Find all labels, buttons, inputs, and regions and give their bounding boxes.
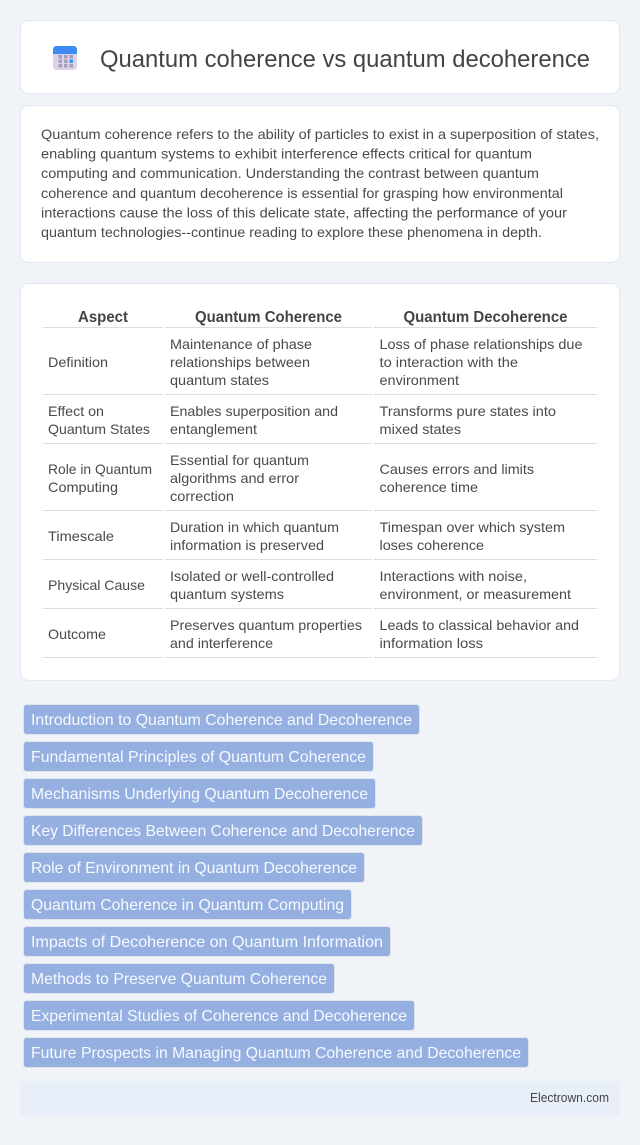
link: experimental studies: [24, 1000, 414, 1030]
link: impacts: [24, 926, 390, 956]
table row: role in quantum computing: correction: [170, 488, 234, 504]
link: future prospects: Future Prospects in Managing Quantum Coherence and Decoherence: [31, 1045, 521, 1062]
table row: physical cause: Physical Cause: [48, 577, 145, 593]
table row: outcome: and interference: [170, 635, 273, 651]
table row: outcome: Leads to classical behavior and: [380, 617, 579, 633]
table row: physical cause: Isolated or well-controlled: [170, 568, 334, 584]
panel: introduction: [20, 106, 620, 262]
link: role of environment: [24, 852, 364, 882]
link: introduction: Introduction to Quantum Coherence and Decoherence: [31, 712, 412, 729]
text block: introduction paragraph: [41, 126, 599, 240]
link: fundamental principles: [24, 742, 374, 772]
table row: definition: [48, 336, 583, 388]
link: fundamental principles: Fundamental Principles of Quantum Coherence: [31, 749, 366, 766]
table header row: [78, 309, 568, 326]
table row: role in quantum computing: Role in Quantum: [48, 461, 152, 477]
table header row: Aspect: [78, 309, 129, 326]
table row: effect on quantum states: entanglement: [170, 421, 257, 437]
text block: introduction paragraph: enabling quantum systems to exhibit interference effects critical for quantum: [41, 146, 532, 162]
title: Quantum coherence vs quantum decoherence: [100, 46, 590, 73]
table row: effect on quantum states: Quantum States: [48, 421, 150, 437]
link: quantum computing: Quantum Coherence in Quantum Computing: [31, 897, 344, 914]
table row: definition: Loss of phase relationships due: [380, 336, 583, 352]
link: mechanisms: Mechanisms Underlying Quantum Decoherence: [31, 786, 368, 803]
table row: timescale: information is preserved: [170, 537, 324, 553]
table header row: Quantum Decoherence: [404, 309, 568, 326]
icon: calendar: [53, 46, 77, 70]
link: impacts: Impacts of Decoherence on Quantum Information: [31, 934, 383, 951]
list of section links: [24, 704, 528, 1068]
table row: outcome: [48, 617, 579, 651]
table row: effect on quantum states: mixed states: [380, 421, 461, 437]
table row: role in quantum computing: Causes errors and limits: [380, 461, 534, 477]
table row: effect on quantum states: [48, 403, 556, 437]
link: methods: Methods to Preserve Quantum Coherence: [31, 971, 327, 988]
table row: role in quantum computing: coherence time: [380, 479, 478, 495]
link: introduction: [24, 704, 420, 734]
link: future prospects: [24, 1038, 528, 1068]
table row: definition: environment: [380, 372, 459, 388]
table row: effect on quantum states: Enables superposition and: [170, 403, 338, 419]
table header row: Quantum Coherence: [195, 309, 342, 326]
table row: role in quantum computing: [48, 452, 534, 504]
table row: timescale: [48, 519, 565, 553]
link: quantum computing: [24, 890, 352, 920]
table row: physical cause: Interactions with noise,: [380, 568, 527, 584]
panel: header: [20, 20, 620, 94]
link: role of environment: Role of Environment in Quantum Decoherence: [31, 860, 357, 877]
table row: role in quantum computing: Computing: [48, 479, 118, 495]
table row: physical cause: quantum systems: [170, 586, 284, 602]
text block: introduction paragraph: coherence and quantum decoherence is essential for grasping how environmental: [41, 185, 563, 201]
text block: introduction paragraph: interactions cause the loss of this delicate state, affecting the performance of your: [41, 204, 567, 220]
table row: timescale: Timescale: [48, 528, 114, 544]
text block: introduction paragraph: Quantum coherence refers to the ability of particles to exist in a superposition of states,: [41, 126, 599, 142]
table row: definition: relationships between: [170, 354, 310, 370]
table row: outcome: Outcome: [48, 626, 106, 642]
footer: [20, 1081, 620, 1115]
panel: comparison table: [20, 284, 620, 680]
footer: Electrown.com: [530, 1091, 609, 1105]
link: mechanisms: [24, 778, 376, 808]
table row: role in quantum computing: Essential for quantum: [170, 452, 309, 468]
table row: outcome: information loss: [380, 635, 483, 651]
table row: physical cause: environment, or measurement: [380, 586, 571, 602]
table row: outcome: Preserves quantum properties: [170, 617, 362, 633]
table row: timescale: Timespan over which system: [380, 519, 565, 535]
link: experimental studies: Experimental Studies of Coherence and Decoherence: [31, 1008, 407, 1025]
link: methods: [24, 964, 334, 994]
table row: role in quantum computing: algorithms and error: [170, 470, 299, 486]
table row: definition: Definition: [48, 354, 108, 370]
table row: effect on quantum states: Transforms pure states into: [380, 403, 556, 419]
table row: physical cause: [48, 568, 571, 602]
table row: definition: to interaction with the: [380, 354, 518, 370]
table row: timescale: Duration in which quantum: [170, 519, 339, 535]
table row: effect on quantum states: Effect on: [48, 403, 104, 419]
table row: definition: Maintenance of phase: [170, 336, 312, 352]
table row: definition: quantum states: [170, 372, 269, 388]
link: key differences: Key Differences Between Coherence and Decoherence: [31, 823, 415, 840]
text block: introduction paragraph: quantum technologies--continue reading to explore these phenomena in depth.: [41, 224, 542, 240]
link: key differences: [24, 816, 422, 846]
table row: timescale: loses coherence: [380, 537, 484, 553]
text block: introduction paragraph: computing and communication. Understanding the contrast between quantum: [41, 165, 539, 181]
